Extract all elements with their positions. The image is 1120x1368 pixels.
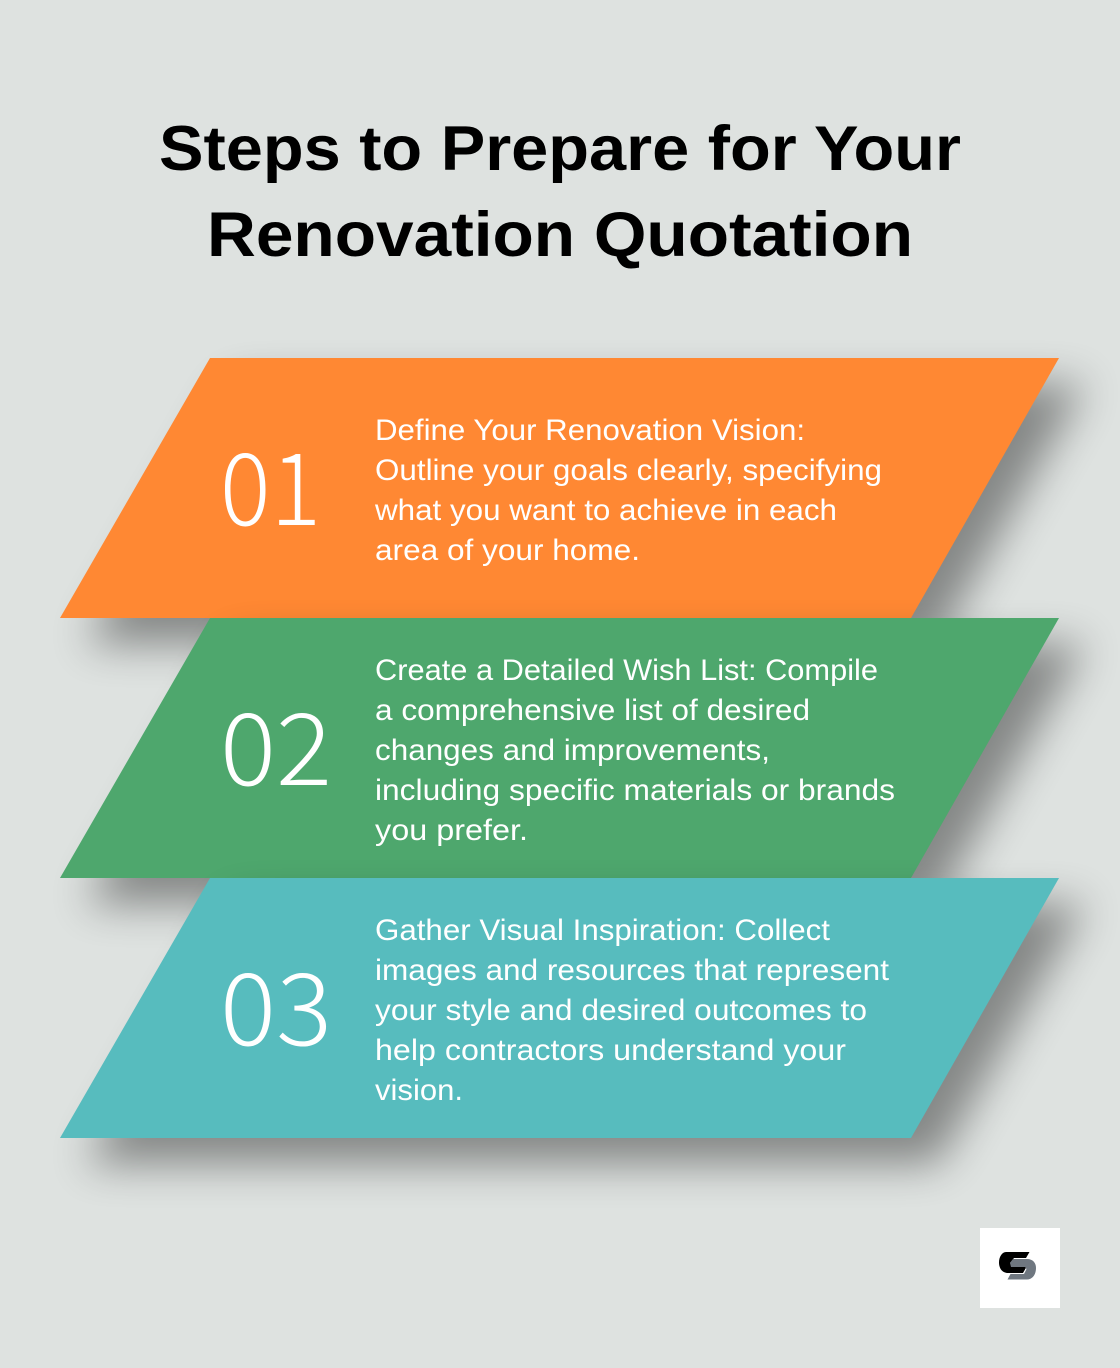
title: Renovation Quotation [207, 200, 913, 270]
number 02: 02 [220, 669, 332, 814]
number 01: 01 [220, 409, 321, 554]
text: step 03: help contractors understand your [375, 1034, 846, 1067]
title: Steps to Prepare for Your [159, 114, 961, 184]
text: step 03: vision. [375, 1074, 463, 1107]
text: step 01: area of your home. [375, 534, 640, 567]
number 03: 03 [220, 929, 332, 1074]
text: step 02: Create a Detailed Wish List: Compile [375, 654, 878, 687]
panel: step 03 [60, 878, 1085, 1164]
text: step 02: a comprehensive list of desired [375, 694, 810, 727]
text: step 01: Outline your goals clearly, specifying [375, 454, 882, 487]
text: step 03: your style and desired outcomes to [375, 994, 867, 1027]
text: step 03: Gather Visual Inspiration: Collect [375, 914, 831, 947]
text: step 01: what you want to achieve in each [374, 494, 837, 527]
panel: step 01 [60, 358, 1085, 644]
text: step 02: you prefer. [375, 814, 528, 847]
text: step 03: images and resources that represent [375, 954, 890, 987]
panel: step 02 [60, 618, 1085, 904]
title [159, 114, 961, 270]
text: step 03 [375, 914, 890, 1107]
text: step 02 [375, 654, 895, 847]
text: step 02: changes and improvements, [375, 734, 770, 767]
logo [980, 1228, 1060, 1308]
text: step 01: Define Your Renovation Vision: [375, 414, 805, 447]
text: step 01 [374, 414, 882, 567]
text: step 02: including specific materials or brands [375, 774, 895, 807]
